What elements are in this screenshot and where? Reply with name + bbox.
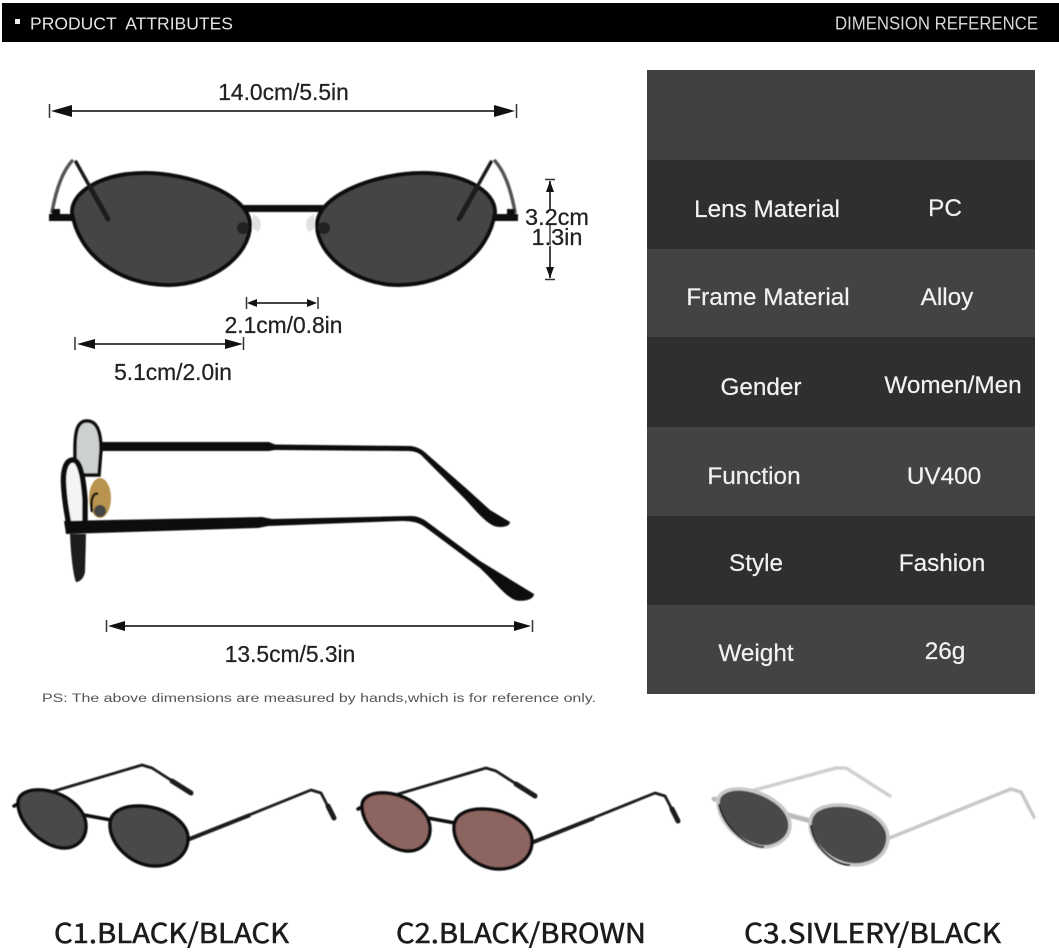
color labels (54, 912, 1002, 951)
lens height dimension: 3.2cm (525, 204, 589, 230)
row: style (729, 550, 985, 577)
far lens ring (75, 421, 101, 475)
side view glasses (63, 421, 534, 601)
near temple arm (64, 516, 534, 601)
temple length dimension (106, 620, 532, 667)
lens height dimension: 1.3in (532, 224, 582, 250)
footnote: PS: The above dimensions are measured by hands,which is for reference only. (42, 693, 596, 705)
row: gender: Gender (720, 374, 802, 401)
row: frame material: Alloy (921, 284, 974, 311)
row: style: Fashion (899, 550, 985, 577)
header title: product attributes: PRODUCT ATTRIBUTES (30, 14, 233, 34)
row: function: Function (707, 463, 801, 490)
row: gender: Women/Men (884, 372, 1022, 399)
left lens (72, 173, 250, 285)
row: weight (718, 638, 965, 667)
temple arms (52, 161, 515, 212)
right lens (317, 173, 495, 285)
attributes table (647, 70, 1035, 694)
nose pads (237, 214, 330, 234)
hinges (49, 209, 518, 221)
near lens ring (63, 460, 85, 530)
row: gender (720, 372, 1022, 401)
arms over lenses (76, 162, 491, 219)
far temple arm (100, 442, 510, 527)
row: frame material (686, 284, 974, 311)
row: lens material: Lens Material (694, 196, 840, 223)
label: C3: C3.SIVLERY/BLACK (744, 912, 1002, 951)
label: C1: C1.BLACK/BLACK (54, 912, 290, 951)
color option 3: silver/black glasses (714, 768, 1034, 865)
color option 2: black/brown glasses (358, 768, 678, 869)
bridge width dimension: 2.1cm/0.8in (225, 312, 342, 338)
row: lens material (694, 195, 962, 223)
bridge width dimension (225, 297, 342, 338)
table rows (647, 70, 1035, 694)
row: style: Style (729, 550, 783, 577)
header bar (2, 3, 1059, 42)
label: C2: C2.BLACK/BROWN (396, 912, 646, 951)
nose pad (89, 478, 111, 518)
lens width dimension: 5.1cm/2.0in (114, 359, 232, 385)
lens height dimension (525, 180, 589, 280)
front view glasses (49, 161, 518, 285)
row: lens material: PC (928, 195, 962, 222)
row: function (707, 463, 981, 490)
color option 1: black/black glasses (14, 765, 334, 866)
bridge (243, 205, 324, 212)
row: weight: 26g (925, 638, 965, 665)
temple length dimension: 13.5cm/5.3in (225, 641, 355, 667)
row: weight: Weight (718, 640, 794, 667)
total width dimension: 14.0cm/5.5in (218, 79, 349, 105)
lens width dimension (75, 337, 244, 385)
header title: dimension reference: DIMENSION REFERENCE (835, 14, 1038, 34)
row: function: UV400 (907, 463, 981, 490)
row: frame material: Frame Material (686, 284, 850, 311)
total width dimension (50, 79, 516, 118)
